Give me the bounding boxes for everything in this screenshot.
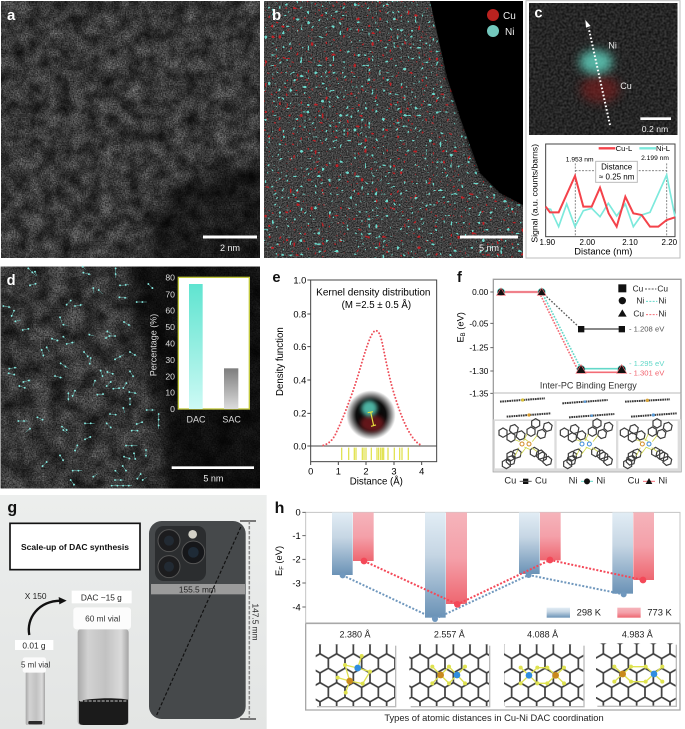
- legend: Ni: [636, 296, 644, 306]
- density plot axes: [275, 275, 437, 488]
- binding energy chart: 0.00: [472, 287, 489, 297]
- line profile chart: [529, 144, 678, 257]
- panel a: electron micrograph: [1, 1, 260, 258]
- phone: 155.5 mm: [179, 584, 216, 594]
- binding energy chart: E: [455, 336, 465, 343]
- molecular structures: [493, 393, 681, 473]
- density plot axes: 0.2: [293, 409, 306, 419]
- legend: Cu: [633, 309, 644, 319]
- inset bar chart: percentage DAC vs SAC: 30: [165, 355, 175, 365]
- bar chart: [274, 508, 680, 623]
- scale bar 5 nm: [172, 466, 254, 483]
- small vial: 5 ml vial: [21, 661, 51, 670]
- panel d: micrograph with atom pairs and inset: [0, 266, 260, 488]
- column labels: Cu: [628, 476, 640, 486]
- density plot axes: 0.4: [293, 375, 306, 385]
- phone: [149, 521, 260, 719]
- column labels: Cu: [504, 476, 516, 486]
- structure 4.983: [596, 643, 677, 707]
- scale bar 5 nm: 5 nm: [203, 473, 223, 483]
- density plot axes: Distance (Å): [350, 477, 403, 488]
- panel g: scale-up photo: [0, 495, 267, 729]
- density plot axes: 0.6: [293, 342, 306, 352]
- structure 2.557: [409, 644, 490, 707]
- bar chart: -2: [292, 555, 301, 565]
- density plot axes: 0: [308, 466, 313, 476]
- column labels: [504, 476, 667, 486]
- large vial: DAC ~15 g: [81, 592, 122, 602]
- inset bar chart: percentage DAC vs SAC: Percentage (%): [148, 314, 158, 376]
- inset bar chart: percentage DAC vs SAC: 10: [165, 388, 175, 398]
- structure 2.380: [316, 644, 396, 707]
- line profile chart: Distance (nm): [574, 247, 632, 257]
- binding energy chart: - 1.295 eV: [629, 359, 665, 368]
- panel label h: h: [275, 500, 284, 517]
- inset bar chart: percentage DAC vs SAC: 50: [165, 322, 175, 332]
- inset bar chart: percentage DAC vs SAC: 70: [165, 289, 175, 299]
- line profile chart: Cu-L: [616, 144, 632, 153]
- line profile chart: 1.953 nm: [566, 156, 594, 163]
- atom pair image: 0.2 nm: [642, 124, 668, 134]
- density plot axes: 4: [419, 466, 424, 476]
- density plot axes: Density function: [275, 327, 286, 396]
- binding energy chart: (eV): [455, 312, 465, 332]
- scale bar 2 nm: [203, 236, 257, 251]
- bar chart: -1: [292, 531, 301, 541]
- density plot axes: 1.0: [293, 275, 306, 285]
- scale arrow: [25, 591, 67, 635]
- structure 4.088: [504, 644, 585, 707]
- legend Cu Ni: Cu: [503, 11, 516, 22]
- lower structures panel: 2.380 Å: [340, 630, 370, 640]
- line profile chart: 2.199 nm: [641, 155, 669, 162]
- legend: 298 K: [577, 608, 602, 618]
- lower structures panel: [306, 623, 680, 710]
- scale arrow: X 150: [25, 591, 47, 601]
- density plot axes: 3: [391, 466, 397, 476]
- inset bar chart: percentage DAC vs SAC: [148, 273, 249, 424]
- title box: Scale-up of DAC synthesis: [21, 542, 129, 552]
- panel label d: d: [7, 273, 16, 289]
- panel label b: b: [272, 7, 281, 24]
- density plot axes: 0.8: [293, 309, 306, 319]
- inset bar chart: percentage DAC vs SAC: 40: [165, 339, 175, 349]
- legend: Cu: [633, 283, 644, 293]
- density plot axes: 2: [363, 466, 369, 476]
- inset bar chart: percentage DAC vs SAC: 0: [170, 404, 175, 414]
- density curve: [323, 331, 422, 446]
- binding energy chart: -1.35: [469, 388, 489, 398]
- bar chart: -4: [292, 602, 301, 612]
- scale bar 2 nm: 2 nm: [220, 243, 240, 253]
- legend: [547, 608, 672, 618]
- title box: [10, 523, 140, 570]
- panel c: single atom pair and line profile: [526, 1, 680, 258]
- axis caption: Types of atomic distances in Cu-Ni DAC coordination: [384, 713, 604, 723]
- bar chart: F: [280, 566, 286, 570]
- inset bar chart: percentage DAC vs SAC: SAC: [222, 414, 241, 424]
- panel label f: f: [457, 270, 462, 286]
- line profile chart: 1.90: [540, 238, 556, 247]
- density plot axes: 1: [336, 466, 341, 476]
- legend: Cu: [657, 283, 668, 293]
- binding energy chart: - 1.301 eV: [629, 369, 665, 378]
- column labels: Ni: [569, 476, 577, 486]
- bar chart: 0: [295, 508, 301, 518]
- line profile chart: Distance: [601, 162, 633, 171]
- lower structures panel: 2.557 Å: [434, 630, 465, 640]
- legend Cu Ni: Ni: [505, 27, 514, 38]
- binding energy chart: [455, 279, 681, 398]
- lower structures panel: 4.983 Å: [622, 630, 653, 640]
- binding energy chart: Inter-PC Binding Energy: [540, 380, 637, 390]
- column labels: Ni: [658, 476, 667, 486]
- scale bar 5 nm: [460, 236, 518, 251]
- inset atom pair image: [346, 390, 396, 440]
- legend Cu Ni: [487, 9, 516, 38]
- atom pair markers: [3, 267, 159, 486]
- atom pair image: Ni: [608, 41, 617, 51]
- panel f: binding energy diagram: [455, 270, 681, 486]
- small vial: 0.01 g: [22, 641, 46, 651]
- bar chart: (eV): [274, 546, 284, 566]
- column labels: Cu: [535, 476, 547, 486]
- rug ticks: [342, 448, 408, 460]
- binding energy chart: -1.25: [469, 343, 489, 353]
- legend: Ni: [658, 296, 666, 306]
- legend: [618, 283, 668, 319]
- density plot axes: 0.0: [293, 441, 306, 451]
- line profile chart: Ni-L: [656, 144, 670, 153]
- atom pair image: [529, 3, 677, 135]
- binding energy chart: -0.05: [469, 319, 489, 329]
- bar chart: E: [274, 570, 284, 576]
- small vial: [15, 640, 53, 725]
- inset bar chart: percentage DAC vs SAC: 80: [165, 273, 175, 283]
- line profile chart: ≈ 0.25 nm: [599, 173, 635, 182]
- line profile chart: 2.20: [662, 238, 678, 247]
- legend: Ni: [658, 309, 666, 319]
- panel label a: a: [7, 7, 16, 24]
- panel e: kernel density chart: [272, 270, 437, 488]
- binding energy chart: -1.30: [469, 366, 489, 376]
- inset bar chart: percentage DAC vs SAC: 20: [165, 371, 175, 381]
- panel label e: e: [272, 270, 280, 286]
- density plot axes: Kernel density distribution: [316, 288, 430, 299]
- panel label g: g: [7, 499, 17, 516]
- binding energy chart: B: [461, 332, 467, 336]
- phone: 147.5 mm: [250, 603, 260, 641]
- line profile chart: 2.10: [622, 238, 638, 247]
- panel b: elemental map with Cu and Ni atoms: [264, 0, 545, 258]
- large vial: [72, 591, 132, 725]
- column labels: Ni: [596, 476, 605, 486]
- inset bar chart: percentage DAC vs SAC: 60: [165, 305, 175, 315]
- scale bar 5 nm: 5 nm: [479, 243, 499, 253]
- atom pair image: Cu: [620, 81, 632, 91]
- density plot axes: (M =2.5 ± 0.5 Å): [342, 300, 411, 311]
- bar chart: -3: [292, 578, 301, 588]
- lower structures panel: 4.088 Å: [527, 630, 558, 640]
- line profile chart: Signal (a.u. counts/barns): [529, 144, 539, 243]
- line profile chart: 2.00: [580, 238, 596, 247]
- atom pair image: c: [534, 5, 542, 21]
- panel h: formation energy chart: [274, 500, 680, 723]
- large vial: 60 ml vial: [85, 613, 120, 623]
- binding energy chart: - 1.208 eV: [629, 325, 665, 334]
- legend: 773 K: [647, 608, 672, 618]
- inset bar chart: percentage DAC vs SAC: DAC: [187, 414, 206, 424]
